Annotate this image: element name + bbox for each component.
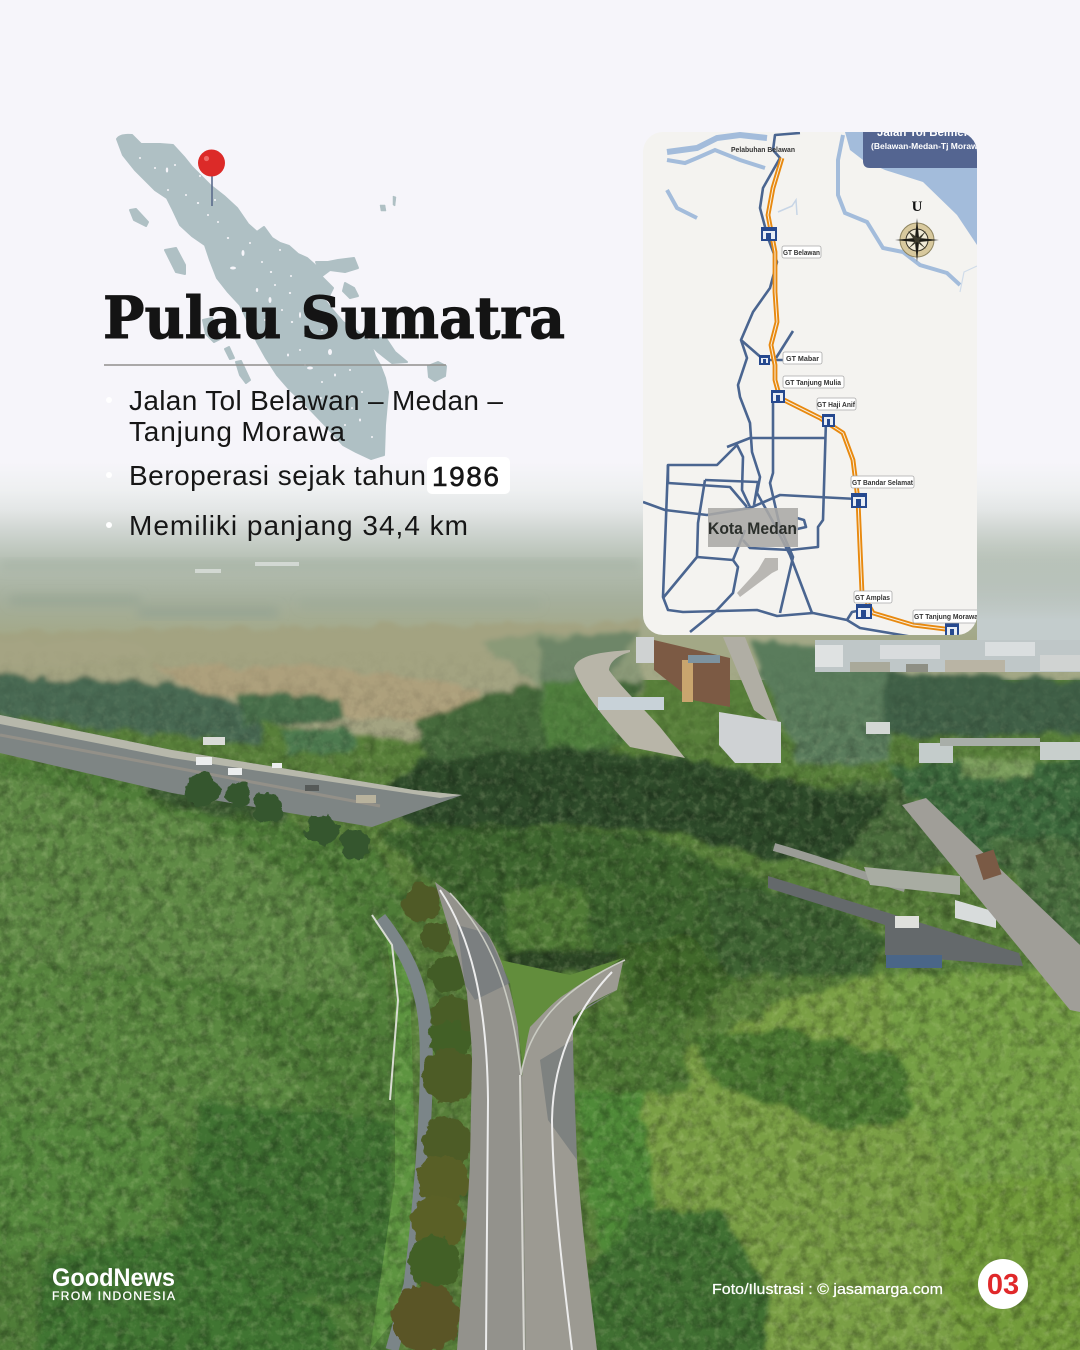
toll plaza road: [574, 650, 685, 758]
north compass: U: [912, 199, 923, 215]
city and airport areas: [737, 558, 778, 597]
roadside ornamental trees: [392, 884, 475, 1350]
map of Sumatra island: [117, 135, 446, 459]
Kota Medan label: [708, 508, 798, 547]
toll road in orange: [768, 158, 953, 630]
north compass: [895, 199, 939, 262]
right background vegetation: [753, 640, 885, 763]
logo: GoodNews from Indonesia: FROM INDONESIA: [52, 1289, 175, 1303]
page number: [978, 1259, 1028, 1309]
distant pale roofs: [195, 562, 299, 573]
route map panel: [643, 125, 985, 637]
gate labels: [731, 147, 983, 623]
gate labels: GT Bandar Selamat: [852, 480, 914, 487]
canal beside road: [380, 918, 426, 1350]
title: Pulau Sumatra: [103, 284, 565, 352]
water: [667, 132, 977, 292]
overpass: [902, 798, 1080, 1012]
central dark tree canopy: [376, 747, 885, 860]
bullet 1: [106, 385, 503, 447]
gate labels: Pelabuhan Belawan: [731, 147, 795, 154]
logo: GoodNews from Indonesia: GoodNews: [52, 1264, 175, 1292]
left forest: [0, 755, 410, 1350]
fence: [372, 915, 398, 1100]
bullet 1: Tanjung Morawa: [129, 416, 345, 447]
gate labels: GT Mabar: [786, 356, 819, 363]
texture overlays: [0, 640, 1080, 1350]
map title banner: (Belawan-Medan-Tj Morawa): [871, 141, 985, 151]
bullet 2: [106, 457, 510, 494]
right tree clumps: [617, 948, 732, 1019]
gate labels: GT Tanjung Mulia: [785, 380, 841, 387]
town roofs: [815, 640, 1080, 672]
grass strip by canal: [370, 930, 415, 1350]
gate labels: GT Amplas: [855, 595, 890, 602]
photo credit: Foto/Ilustrasi : © jasamarga.com: [712, 1281, 943, 1298]
hazy distant city right of map: [977, 564, 1080, 640]
Kota Medan label: Kota Medan: [708, 520, 797, 538]
far tree belt: [0, 672, 262, 745]
bullet 1: Jalan Tol Belawan – Medan –: [129, 385, 503, 416]
page number: 03: [987, 1269, 1019, 1301]
road markings: [440, 890, 488, 1350]
logo: GoodNews from Indonesia: [52, 1264, 175, 1303]
two-branch road: [435, 882, 526, 1350]
roadside trees on highway: [185, 773, 370, 860]
verge between branches: [500, 958, 623, 1067]
verge: [573, 1085, 660, 1250]
gate labels: GT Haji Anif: [817, 402, 856, 409]
road shadows: [457, 925, 510, 1000]
bullet list: [106, 385, 510, 541]
speckles: [139, 157, 373, 438]
distant city haze: [0, 487, 1080, 680]
buildings: [654, 640, 730, 707]
bullet 3: Memiliki panjang 34,4 km: [129, 510, 468, 541]
bullet 2: Beroperasi sejak tahun: [129, 460, 426, 491]
right of fields trees: [412, 678, 646, 761]
arterial roads: [643, 133, 913, 637]
map title banner: Jalan Tol Belmera: [877, 127, 975, 139]
gate labels: GT Belawan: [783, 250, 820, 257]
map title banner: [863, 125, 985, 168]
cars: [196, 737, 376, 803]
right grassy slope: [638, 972, 960, 1350]
main highway right: [768, 876, 1023, 966]
brown fields: [0, 622, 640, 745]
toll gates: [759, 227, 959, 637]
map pin: [198, 150, 225, 206]
main highway left: [0, 715, 462, 827]
far hazy tree lines: [18, 598, 274, 616]
background: aerial photo of toll road interchange: [0, 440, 1080, 1350]
gate labels: GT Tanjung Morawa: [914, 614, 978, 621]
bullet 2: 1986: [432, 461, 499, 492]
